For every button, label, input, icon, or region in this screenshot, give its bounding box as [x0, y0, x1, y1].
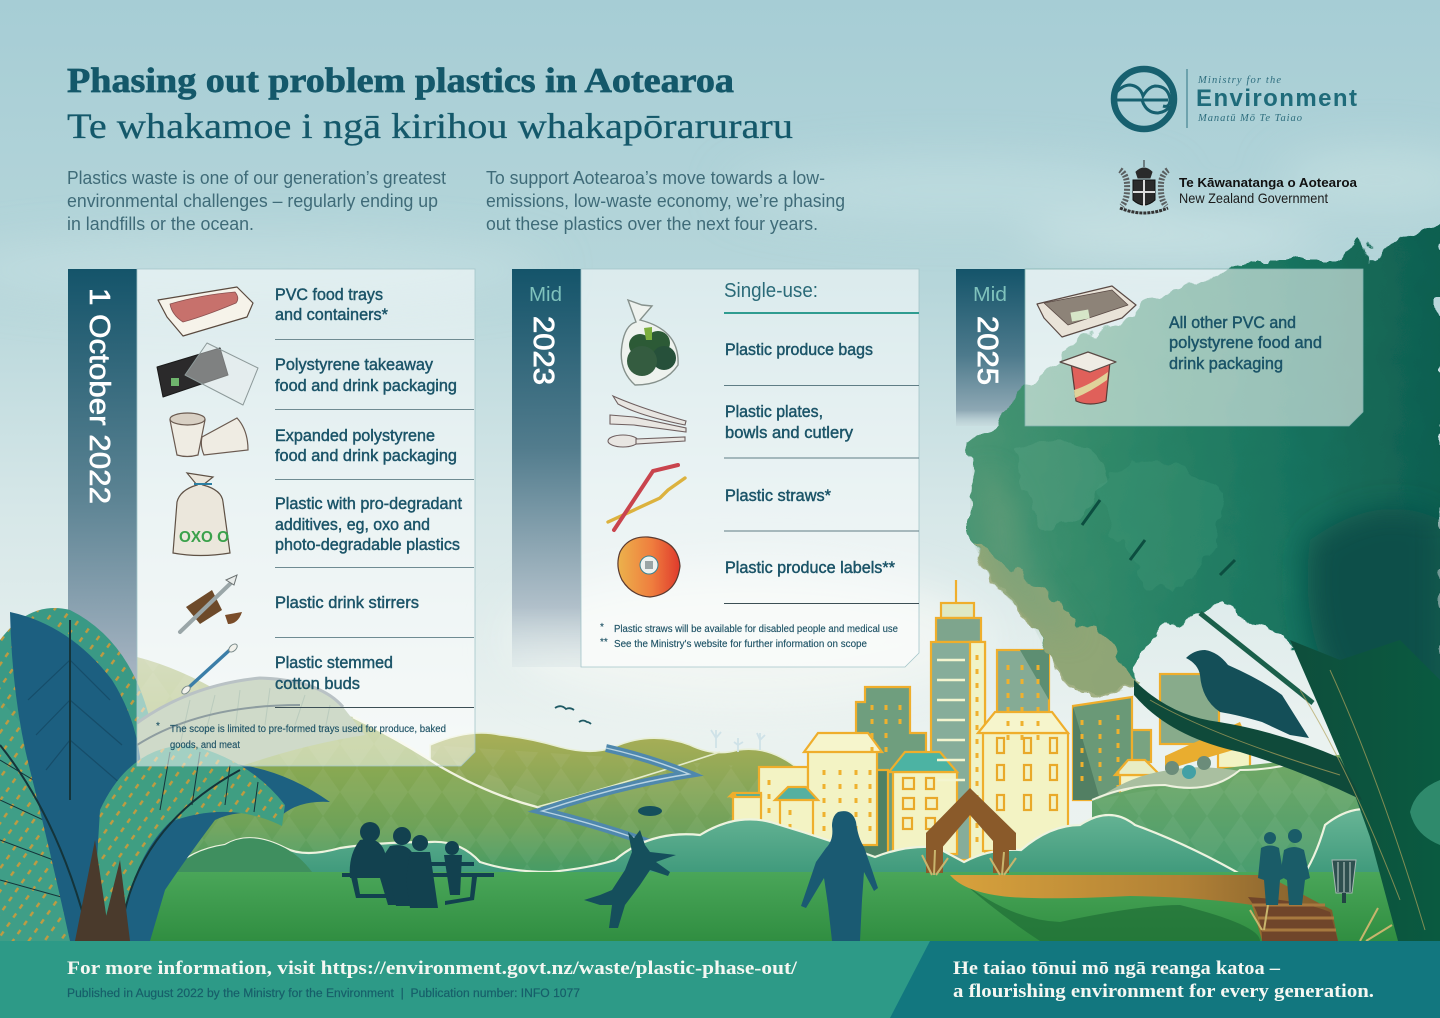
- people walking: [1258, 829, 1310, 905]
- tree trunk and branch: [1134, 613, 1440, 941]
- item: pro-degradant plastics: [275, 495, 462, 554]
- river: [542, 748, 689, 847]
- leaf: pale under panel: [137, 678, 365, 770]
- heading: Single-use:: [724, 280, 818, 302]
- icon: cotton bud: [180, 642, 239, 696]
- footnote: The scope is limited to pre-formed trays used for produce, baked: [170, 724, 446, 735]
- icon: oxo bag: OXO O: [179, 529, 229, 546]
- icon: polystyrene takeaway tray: [157, 343, 258, 405]
- logo: New Zealand Government: Te Kāwanatanga o Aotearoa: [1179, 175, 1358, 190]
- icon: coat of arms: [1120, 160, 1168, 213]
- panel: Mid 2025: [971, 269, 1363, 426]
- woman silhouette: [801, 811, 878, 941]
- icon: plastic straws: [608, 465, 685, 530]
- item: Plastic straws*: [725, 487, 832, 505]
- panel background: [137, 269, 475, 766]
- wind turbines: [711, 730, 765, 752]
- wooden gateway: [926, 788, 1016, 873]
- tagline: He taiao tōnui mō ngā reanga katoa –: [953, 958, 1281, 979]
- dog and frisbee: [584, 806, 676, 928]
- intro text right: [486, 168, 845, 234]
- icon: produce bag with broccoli: [621, 300, 678, 385]
- footnotes: **: [600, 637, 608, 648]
- publication line: Published in August 2022 by the Ministry for the Environment | Publication number: INFO 1077: [67, 988, 580, 1000]
- item: polystyrene: food and drink packaging: [275, 377, 457, 395]
- city skyline: [730, 580, 1252, 860]
- item: PVC trays: [275, 286, 389, 324]
- icon: apple with label: [618, 537, 680, 597]
- clouds: [0, 150, 1440, 710]
- icon: plastic cutlery: [608, 396, 686, 447]
- footnote: goods, and meat: [170, 740, 240, 751]
- date label: Mid: [529, 284, 562, 306]
- item: Plastic plates,: [725, 403, 823, 421]
- icon: foam cups: [170, 413, 248, 456]
- item: expanded polystyrene: Expanded polystyrene: [275, 427, 435, 445]
- item: polystyrene food and: [1169, 334, 1322, 352]
- logo: New Zealand Government: [1120, 160, 1358, 213]
- main hill: [137, 657, 720, 880]
- footer link: For more information, visit https://environment.govt.nz/waste/plastic-phase-out/: [67, 958, 798, 979]
- item: expanded polystyrene: food and drink packaging: [275, 447, 457, 465]
- intro text right: out these plastics over the next four years.: [486, 214, 818, 234]
- date label: Mid: [973, 284, 1007, 306]
- item: PVC trays: and containers*: [275, 306, 389, 324]
- timeline bar: 1 October 2022: [68, 269, 137, 766]
- item: cotton buds: [275, 654, 393, 693]
- panel: Mid 2023: [527, 269, 919, 667]
- intro text right: To support Aotearoa’s move towards a low-: [486, 168, 825, 188]
- item: pro-degradant plastics: additives, eg, oxo and: [275, 516, 430, 534]
- tagline: [953, 958, 1374, 1002]
- item: Plastic produce labels**: [725, 559, 896, 577]
- small trees: [1165, 756, 1211, 779]
- icon: drink stirrer: [180, 575, 242, 632]
- grass tufts: [922, 850, 1392, 941]
- panel background: [581, 269, 919, 667]
- intro text left: environmental challenges – regularly ending up: [67, 191, 438, 211]
- item: bowls and cutlery: [725, 424, 854, 442]
- litter bin: [1332, 860, 1356, 903]
- tree canopy: [970, 225, 1440, 730]
- picnic family: [342, 822, 494, 908]
- item: drink packaging: [1169, 355, 1283, 373]
- walking path: [950, 875, 1338, 941]
- footnote: *: [156, 721, 160, 732]
- logo: New Zealand Government: New Zealand Government: [1179, 190, 1328, 206]
- tagline: a flourishing environment for every generation.: [953, 981, 1374, 1002]
- logo: Ministry for the Environment: [1114, 69, 1357, 129]
- subtitle: Te whakamoe i ngā kirihou whakapōraruraru: [67, 106, 793, 146]
- date label: [971, 284, 1007, 385]
- intro text left: Plastics waste is one of our generation’s greatest: [67, 168, 446, 188]
- title: Phasing out problem plastics in Aotearoa: [67, 61, 734, 100]
- item: pro-degradant plastics: photo-degradable plastics: [275, 536, 460, 554]
- ground: [0, 872, 1440, 944]
- date label: [527, 284, 562, 385]
- leaf: blue main: [10, 612, 142, 941]
- item: pro-degradant plastics: Plastic with pro-degradant: [275, 495, 462, 513]
- footnotes: *: [600, 622, 604, 633]
- leaf: blue right with tip: [90, 762, 330, 941]
- hills behind city: [430, 733, 840, 880]
- intro text right: emissions, low-waste economy, we’re phasing: [486, 191, 845, 211]
- landscape illustration: [0, 225, 1440, 944]
- footnotes: Plastic straws will be available for disabled people and medical use: [614, 624, 898, 635]
- item: Plastic produce bags: [725, 341, 873, 359]
- footnote: [156, 721, 446, 751]
- timeline bar: Mid 2025: [956, 269, 1025, 426]
- leaf: teal back: [0, 608, 154, 900]
- intro text left: in landfills or the ocean.: [67, 214, 254, 234]
- footnotes: See the Ministry's website for further information on scope: [614, 639, 867, 650]
- leaf: teal dotted right: [92, 745, 285, 941]
- panel background: [1025, 269, 1363, 426]
- ground shadow: [960, 880, 1260, 941]
- date label: 2025: [971, 316, 1003, 385]
- building windows: [769, 655, 1118, 850]
- item: expanded polystyrene: [275, 427, 457, 465]
- logo: Ministry for the Environment: Ministry for the: [1197, 75, 1281, 86]
- intro text left: [67, 168, 446, 234]
- item: All other PVC and: [1169, 314, 1296, 332]
- icon: grey tray: [1037, 286, 1136, 337]
- birds: [555, 706, 591, 724]
- icon: oxo bag: [173, 473, 230, 556]
- icon: PVC meat tray: [158, 287, 253, 336]
- timeline bar: Mid 2023: [512, 269, 581, 667]
- footnotes: [600, 622, 898, 650]
- right hill: [1092, 740, 1440, 900]
- footer band: [0, 941, 1440, 1018]
- item: polystyrene: [275, 356, 457, 395]
- date label: 2023: [527, 316, 559, 385]
- bird: [1186, 650, 1309, 738]
- icon: yoghurt pot: [1060, 352, 1116, 404]
- date label: 1 October 2022: [83, 288, 115, 504]
- leaf: lower left: [0, 700, 100, 941]
- item: [1169, 314, 1322, 373]
- logo: Ministry for the Environment: Environment: [1196, 85, 1357, 112]
- logo: Ministry for the Environment: Manatū Mō Te Taiao: [1197, 113, 1302, 124]
- item: [725, 403, 854, 442]
- panel: 1 October 2022: [83, 269, 475, 766]
- bushes: [170, 809, 1420, 900]
- item: polystyrene: Polystyrene takeaway: [275, 356, 434, 374]
- item: PVC trays: PVC food trays: [275, 286, 383, 304]
- item: cotton buds: cotton buds: [275, 675, 360, 693]
- item: drink stirrers: Plastic drink stirrers: [275, 594, 419, 612]
- item: cotton buds: Plastic stemmed: [275, 654, 393, 672]
- large leaves: [0, 608, 365, 941]
- icon: koru circle: [1114, 69, 1174, 129]
